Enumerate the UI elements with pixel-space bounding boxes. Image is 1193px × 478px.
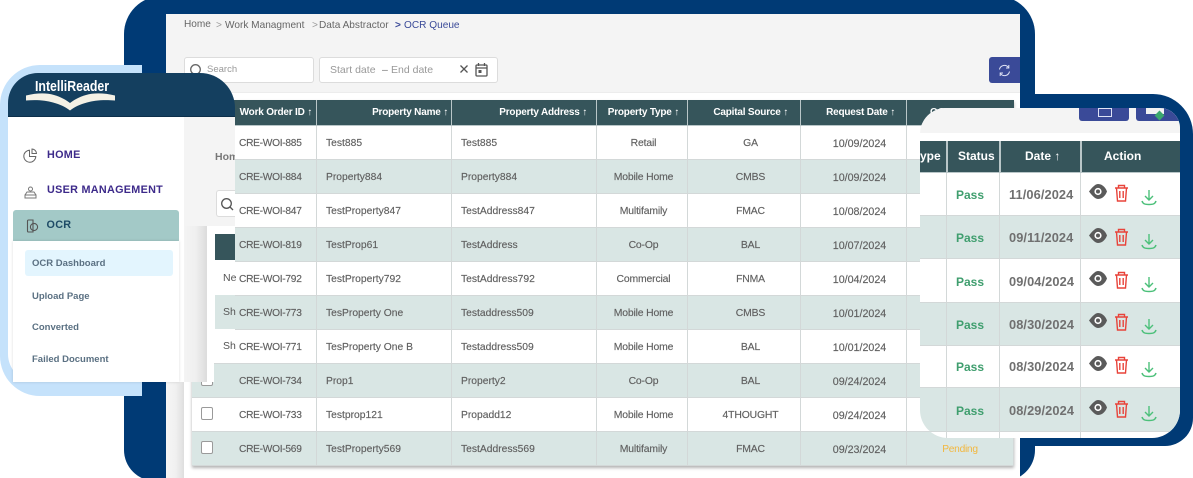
breadcrumb: > <box>395 20 401 31</box>
main data table: Mobile Home <box>614 308 673 319</box>
main data table: Commercial <box>617 274 670 285</box>
left shadow strip <box>166 93 184 478</box>
main data table: TesProperty One B <box>326 342 413 353</box>
embedded table header <box>215 234 235 260</box>
main data table: FMAC <box>736 206 765 217</box>
main data table: TesProperty One <box>326 308 403 319</box>
breadcrumb <box>184 19 460 31</box>
embedded row 3: Sh <box>223 340 236 352</box>
submenu: upload page: Upload Page <box>32 291 90 302</box>
main data table: Capital Source ↑ <box>713 107 788 118</box>
menu: home <box>23 148 81 163</box>
icon: search <box>221 198 234 210</box>
main data table: Mobile Home <box>614 172 673 183</box>
grey background <box>179 116 235 226</box>
action icons <box>1089 184 1157 422</box>
breadcrumb: Work Managment <box>225 20 304 31</box>
main data table: CRE-WOI-884 <box>239 172 302 183</box>
icon: users <box>24 186 36 198</box>
icon: refresh <box>999 64 1010 76</box>
main data table: 09/24/2024 <box>833 376 886 388</box>
icon: pie chart <box>23 148 37 163</box>
main data table: Retail <box>631 138 656 149</box>
card toolbar <box>920 108 1180 133</box>
main data table: GA <box>743 138 758 149</box>
main data table: CRE-WOI-733 <box>239 410 302 421</box>
shadow strip <box>179 226 207 382</box>
menu: OCR active <box>12 210 179 241</box>
icons row 5 <box>1089 356 1156 376</box>
main data table: Property Name ↑ <box>372 107 448 118</box>
embedded row 2: Sh <box>223 306 236 318</box>
main data table: TestProperty847 <box>326 206 401 217</box>
main data table: TestAddress792 <box>461 274 535 285</box>
row 5 <box>920 346 1180 388</box>
icons row 6 <box>1089 400 1156 420</box>
main screen <box>166 14 1020 478</box>
row 5: 08/30/2024 <box>1009 359 1074 374</box>
main data table: CRE-WOI-771 <box>239 342 302 353</box>
main data table: 09/23/2024 <box>833 444 886 456</box>
main data table: FMAC <box>736 444 765 455</box>
left card sidebar <box>8 116 184 382</box>
breadcrumb: Home <box>184 19 211 30</box>
main data table: Testaddress509 <box>461 342 534 353</box>
main data table: CRE-WOI-792 <box>239 274 302 285</box>
main data table: TestProperty792 <box>326 274 401 285</box>
row 5: Pass <box>956 360 984 374</box>
main data table: CRE-WOI-773 <box>239 308 302 319</box>
menu: user management: USER MANAGEMENT <box>47 184 163 196</box>
breadcrumb: Data Abstractor <box>319 20 389 31</box>
main data table: CRE-WOI-569 <box>239 444 302 455</box>
embedded row 1 <box>215 260 235 295</box>
main data table: Property2 <box>461 376 506 387</box>
main data table: BAL <box>741 376 760 387</box>
main data table: 10/09/2024 <box>833 138 886 150</box>
embedded search box <box>216 190 235 217</box>
main data table: CRE-WOI-819 <box>239 240 302 251</box>
main data table: CRE-WOI-734 <box>239 376 302 387</box>
row 6: Pass <box>956 404 984 418</box>
main data table: 10/07/2024 <box>833 240 886 252</box>
table header: Date ↑ <box>1025 149 1060 163</box>
main data table: BAL <box>741 240 760 251</box>
breadcrumb: > <box>216 20 222 31</box>
main data table: CRE-WOI-885 <box>239 138 302 149</box>
search box <box>184 57 314 83</box>
main data table: Property Type ↑ <box>608 107 679 118</box>
main data table: Property884 <box>326 172 382 183</box>
main data table: TestAddress847 <box>461 206 535 217</box>
column lines <box>946 173 1081 438</box>
search box: Search <box>207 64 237 75</box>
row 1: 11/06/2024 <box>1009 187 1073 202</box>
main data table: TestProp61 <box>326 240 378 251</box>
row 3: 09/04/2024 <box>1009 274 1074 289</box>
main data table: FNMA <box>736 274 765 285</box>
refresh button <box>989 57 1020 83</box>
main data table: Multifamily <box>620 444 667 455</box>
main data table: 10/01/2024 <box>833 342 886 354</box>
date range picker: End date <box>391 64 433 76</box>
logo: IntelliReader: IntelliReader <box>35 78 109 95</box>
icons row 3 <box>1089 271 1156 292</box>
icons row 2 <box>1089 228 1156 248</box>
icon: search <box>190 64 201 73</box>
row 4 <box>920 303 1180 346</box>
right status card <box>920 108 1180 438</box>
submenu: OCR dashboard <box>25 250 173 276</box>
left card embedded grey page <box>184 117 236 382</box>
main data table: Testprop121 <box>326 410 383 421</box>
main data table: 4THOUGHT <box>723 410 778 421</box>
top toolbar area <box>166 14 1020 93</box>
main data table: Prop1 <box>326 376 353 387</box>
main data table: Co-Op <box>629 240 658 251</box>
table header <box>920 141 1180 173</box>
menu: OCR active: OCR <box>46 219 71 231</box>
main data table: OCR Status <box>930 107 984 118</box>
date range picker: Start date <box>330 64 376 76</box>
main data table: 10/01/2024 <box>833 308 886 320</box>
navy back frame <box>124 0 1035 478</box>
embedded row 3 <box>215 329 235 363</box>
table header: ype <box>920 149 941 163</box>
main data table: TestAddress <box>461 240 518 251</box>
embedded row 1: Ne <box>223 272 236 284</box>
main data table: TestAddress569 <box>461 444 535 455</box>
toolbar button two <box>1136 102 1186 121</box>
icon: clear <box>460 65 468 73</box>
main data table: Request Date ↑ <box>826 107 895 118</box>
breadcrumb: OCR Queue <box>404 20 460 31</box>
icon: OCR <box>26 220 38 232</box>
main data table: BAL <box>741 342 760 353</box>
toolbar button one <box>1079 102 1129 121</box>
row 2: Pass <box>956 231 984 245</box>
table header: Status <box>958 149 995 163</box>
row 6 <box>920 388 1180 432</box>
main data table: TestProperty569 <box>326 444 401 455</box>
main data table: Multifamily <box>620 206 667 217</box>
submenu: OCR dashboard: OCR Dashboard <box>32 258 105 269</box>
row 1: Pass <box>956 188 984 202</box>
right card navy frame <box>1020 94 1193 446</box>
menu: home: HOME <box>47 149 81 161</box>
white panel lower edge <box>207 363 214 382</box>
row 4: 08/30/2024 <box>1009 317 1074 332</box>
main data table: Propadd12 <box>461 410 511 421</box>
main data table: CMBS <box>736 308 765 319</box>
main data table: Co-Op <box>629 376 658 387</box>
icons row 4 <box>1089 313 1156 334</box>
embedded row 2 <box>215 295 235 329</box>
date range picker <box>319 57 498 83</box>
main data table <box>192 100 1014 466</box>
main data table: Mobile Home <box>614 342 673 353</box>
submenu: converted: Converted <box>32 322 79 333</box>
main data table: Work Order ID ↑ <box>240 107 312 118</box>
logo: IntelliReader <box>26 78 115 110</box>
menu: user management <box>24 184 163 198</box>
icon: calendar <box>475 63 488 77</box>
main data table: 10/04/2024 <box>833 274 886 286</box>
left card backing light blue <box>0 65 142 396</box>
main data table: Testaddress509 <box>461 308 534 319</box>
row 3: Pass <box>956 275 984 289</box>
main data table: 09/24/2024 <box>833 410 886 422</box>
main data table: Test885 <box>461 138 497 149</box>
table header: Action <box>1104 149 1141 163</box>
submenu: failed document: Failed Document <box>32 354 109 365</box>
main data table: CMBS <box>736 172 765 183</box>
main data table: Pending <box>942 444 978 455</box>
main data table: 10/09/2024 <box>833 172 886 184</box>
OCR submenu <box>12 241 179 382</box>
white panel <box>207 226 235 363</box>
left card header <box>8 73 235 116</box>
main data table: Test885 <box>326 138 362 149</box>
row 6: 08/29/2024 <box>1009 403 1074 418</box>
main data table: Property884 <box>461 172 517 183</box>
row 2: 09/11/2024 <box>1009 230 1073 245</box>
row 1 <box>920 173 1180 216</box>
row 4: Pass <box>956 318 984 332</box>
date range picker: – <box>382 64 388 76</box>
breadcrumb: > <box>312 20 318 31</box>
row 3 <box>920 259 1180 303</box>
row 2 <box>920 216 1180 259</box>
main data table: Property Address ↑ <box>499 107 587 118</box>
main data table: 10/08/2024 <box>833 206 886 218</box>
icons row 1 <box>1089 184 1156 204</box>
main data table: Mobile Home <box>614 410 673 421</box>
main data table: CRE-WOI-847 <box>239 206 302 217</box>
